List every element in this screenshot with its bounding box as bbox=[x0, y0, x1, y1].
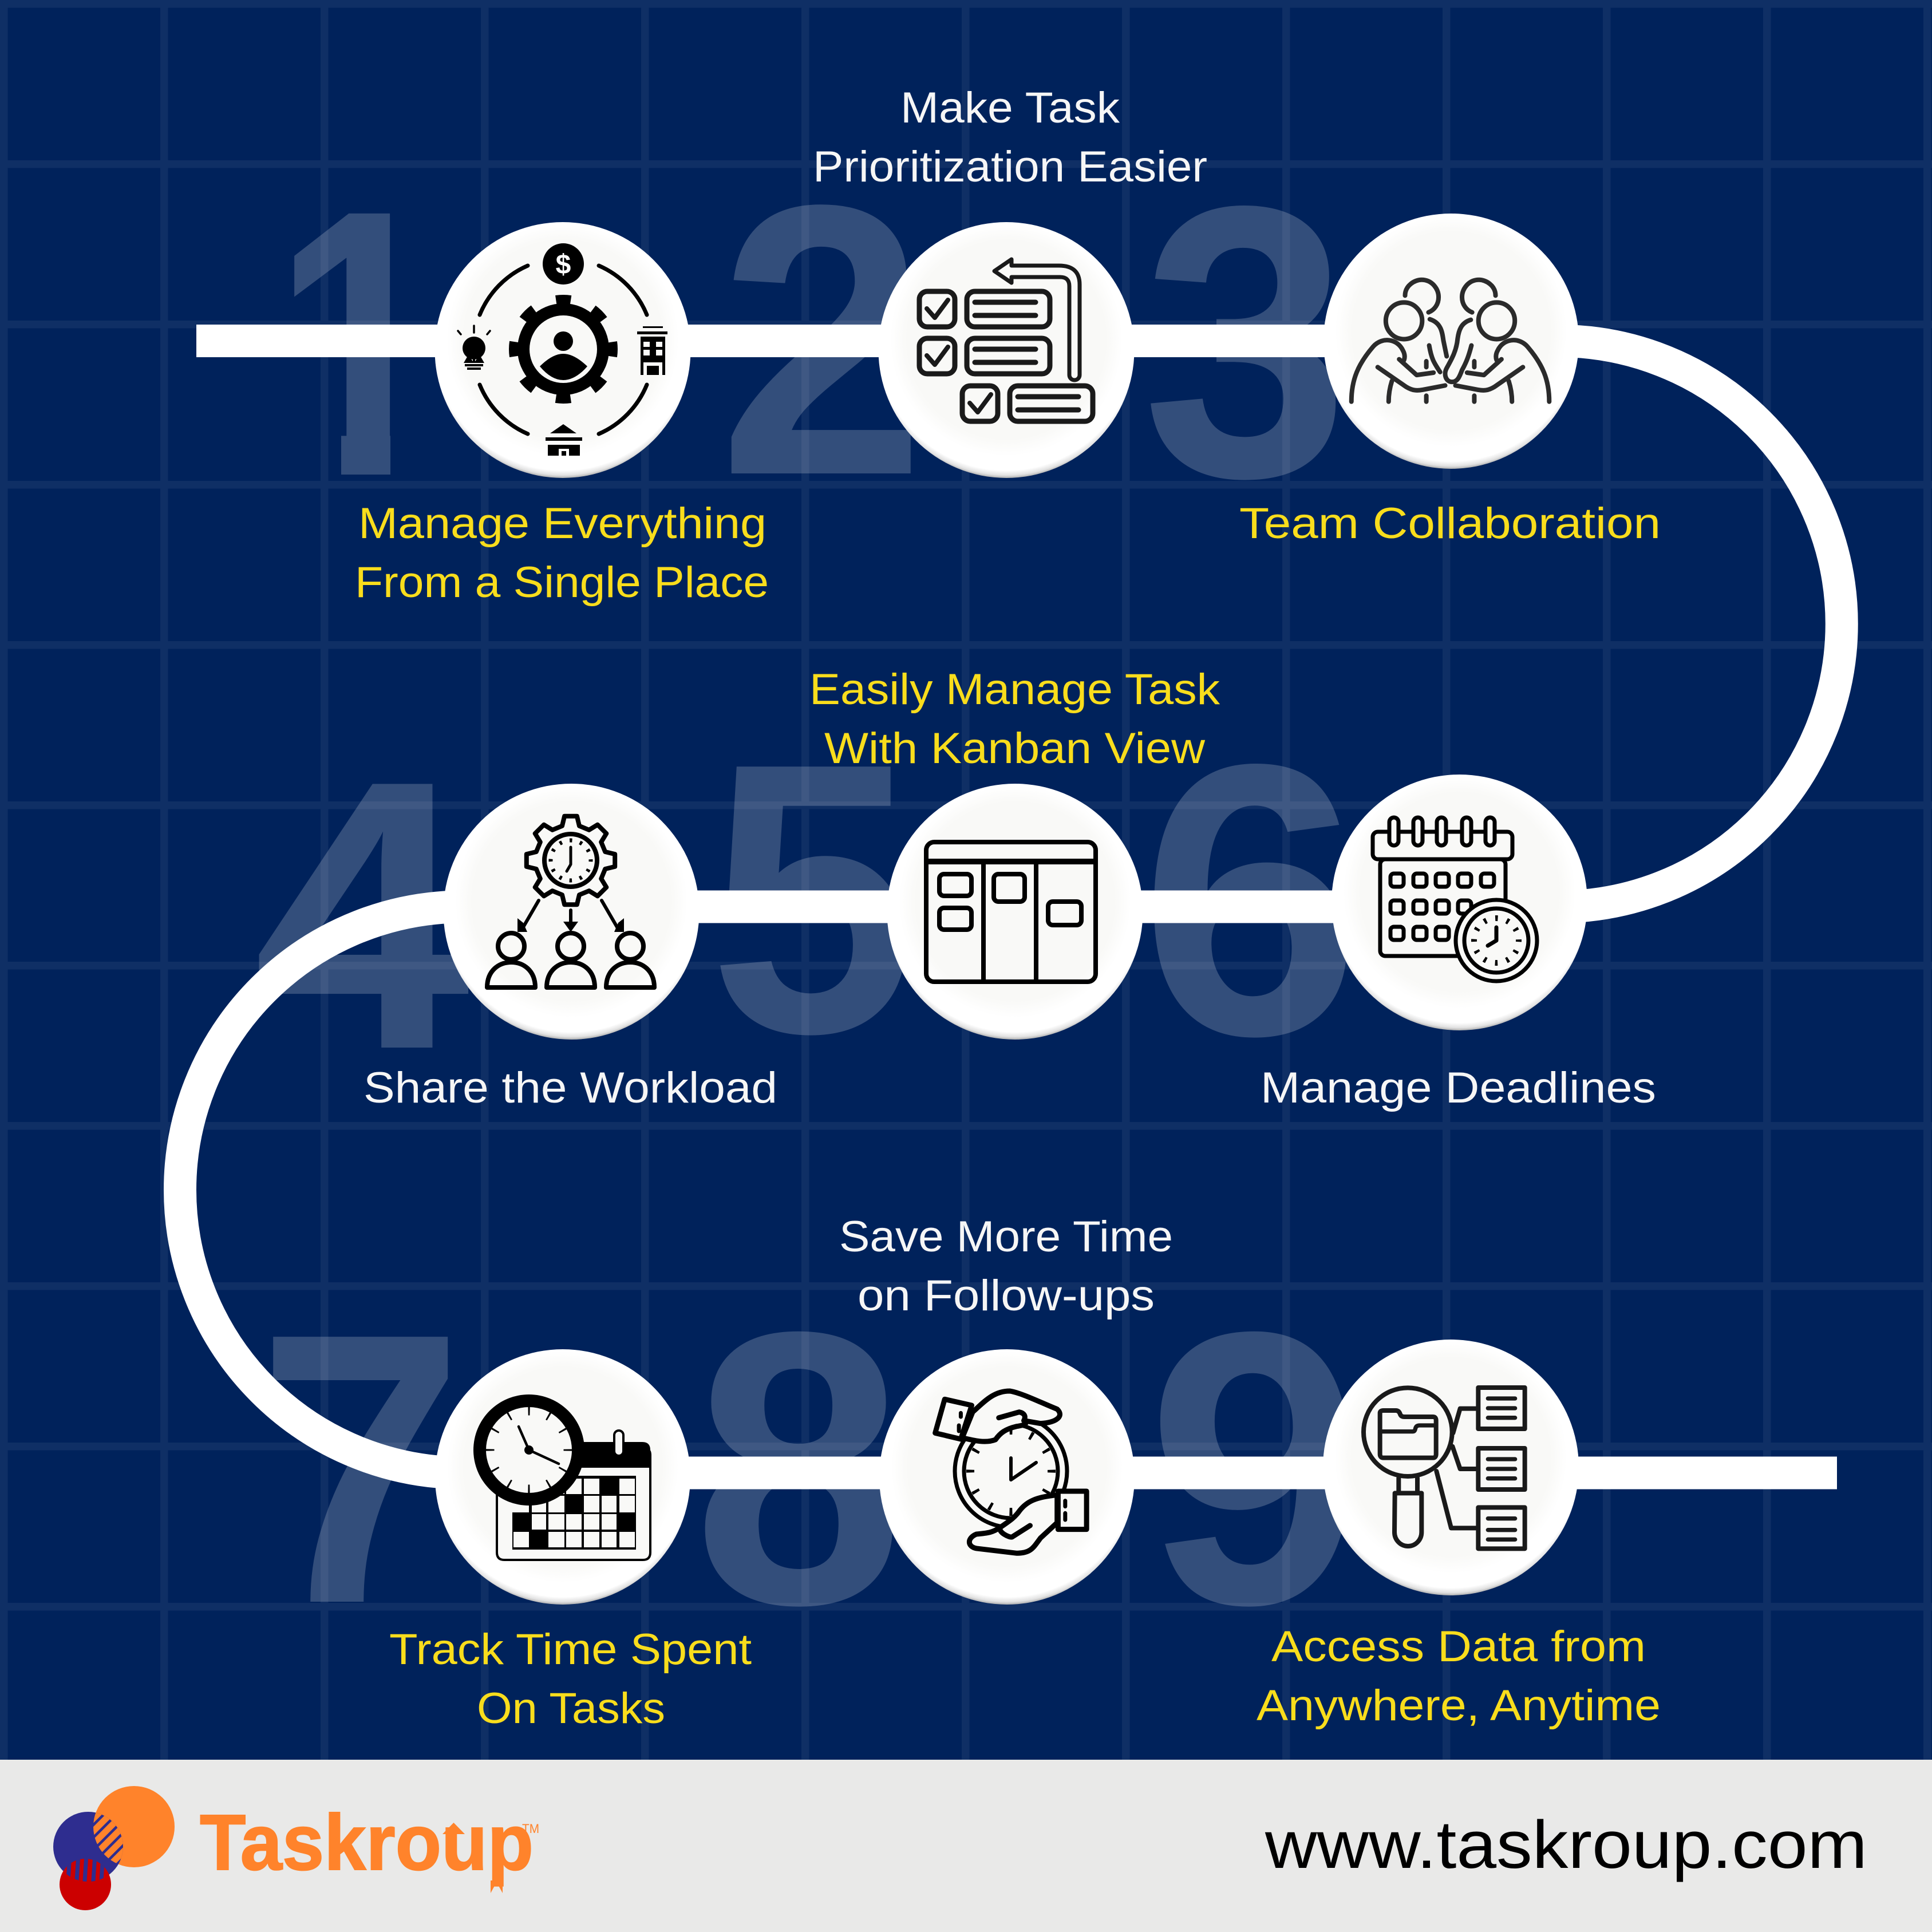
label: Track Time Spent On Tasks: On Tasks bbox=[477, 1684, 665, 1733]
label: Easily Manage Task With Kanban View: Easily Manage Task bbox=[809, 665, 1220, 714]
winding white track bbox=[180, 341, 1842, 1473]
step 6: manage deadlines icon bbox=[1332, 775, 1587, 1030]
circle bbox=[887, 784, 1143, 1040]
icon: team in discussion bbox=[1352, 280, 1549, 402]
label: Access Data from Anywhere, Anytime: Access Data from bbox=[1271, 1622, 1646, 1671]
label: Make Task Prioritization Easier bbox=[813, 84, 1207, 191]
number 3: 3 bbox=[1142, 125, 1349, 558]
number 9: 9 bbox=[1147, 1251, 1364, 1686]
label: Track Time Spent On Tasks bbox=[389, 1625, 752, 1733]
label: Access Data from Anywhere, Anytime bbox=[1257, 1622, 1661, 1730]
label: Access Data from Anywhere, Anytime: Anywhere, Anytime bbox=[1257, 1681, 1661, 1730]
label: Easily Manage Task With Kanban View bbox=[809, 665, 1220, 773]
label: Manage Everything From a Single Place: From a Single Place bbox=[355, 558, 769, 607]
step 7: track time icon bbox=[435, 1349, 690, 1605]
label: Save More Time on Follow-ups bbox=[839, 1212, 1173, 1320]
label: Share the Workload: Share the Workload bbox=[364, 1064, 777, 1112]
step 2: task prioritization icon bbox=[878, 222, 1135, 478]
step 5: kanban icon bbox=[887, 784, 1143, 1040]
number 5: 5 bbox=[709, 683, 916, 1113]
label: Save More Time on Follow-ups: on Follow-ups bbox=[858, 1271, 1155, 1320]
label: Make Task Prioritization Easier: Prioritization Easier bbox=[813, 143, 1207, 191]
circle bbox=[1323, 214, 1579, 469]
icon: calendar with clock bbox=[1373, 817, 1537, 981]
icon: gear with person and surrounding items bbox=[458, 243, 667, 456]
circle bbox=[879, 1349, 1135, 1605]
icon: clock with calendar bbox=[473, 1394, 650, 1560]
label: Make Task Prioritization Easier: Make Task bbox=[900, 84, 1120, 132]
label: Track Time Spent On Tasks: Track Time Spent bbox=[389, 1625, 752, 1674]
label: Manage Everything From a Single Place: Manage Everything bbox=[358, 499, 767, 548]
label: Easily Manage Task With Kanban View: With Kanban View bbox=[824, 724, 1206, 773]
icon: gear clock and three people bbox=[487, 816, 654, 987]
circle bbox=[1332, 775, 1587, 1030]
step 8: save time icon bbox=[879, 1349, 1135, 1605]
logo mark: overlapping circles bbox=[53, 1786, 175, 1910]
label: Manage Everything From a Single Place bbox=[355, 499, 769, 607]
circle bbox=[443, 784, 700, 1040]
number 2: 2 bbox=[718, 125, 926, 555]
number 4: 4 bbox=[253, 701, 473, 1129]
circle bbox=[435, 1349, 690, 1605]
icon: magnifier with folder and documents bbox=[1364, 1388, 1525, 1548]
logo wordmark: Taskroup bbox=[200, 1799, 534, 1887]
logo wordmark: TM bbox=[522, 1822, 539, 1836]
label: Team Collaboration: Team Collaboration bbox=[1239, 499, 1661, 548]
step 3: team collaboration icon bbox=[1323, 214, 1579, 469]
icon: gear with person and surrounding items: $ bbox=[556, 250, 571, 280]
website url: www.taskroup.com bbox=[1265, 1807, 1867, 1883]
circle bbox=[1323, 1340, 1579, 1595]
circle bbox=[878, 222, 1135, 478]
step 1: manage everything icon bbox=[435, 222, 690, 478]
circle bbox=[435, 222, 690, 478]
label: Manage Deadlines: Manage Deadlines bbox=[1261, 1064, 1656, 1112]
icon: checklist with arrow bbox=[919, 259, 1093, 421]
icon: kanban board bbox=[926, 842, 1096, 982]
step 9: access data icon bbox=[1323, 1340, 1579, 1595]
number 1: 1 bbox=[272, 132, 449, 555]
label: Save More Time on Follow-ups: Save More Time bbox=[839, 1212, 1173, 1261]
footer band bbox=[0, 1760, 1932, 1932]
number 7: 7 bbox=[257, 1254, 464, 1684]
step 4: share the workload icon bbox=[443, 784, 700, 1040]
number 8: 8 bbox=[693, 1251, 904, 1686]
number 6: 6 bbox=[1140, 684, 1361, 1116]
icon: hands holding clock bbox=[935, 1391, 1086, 1553]
